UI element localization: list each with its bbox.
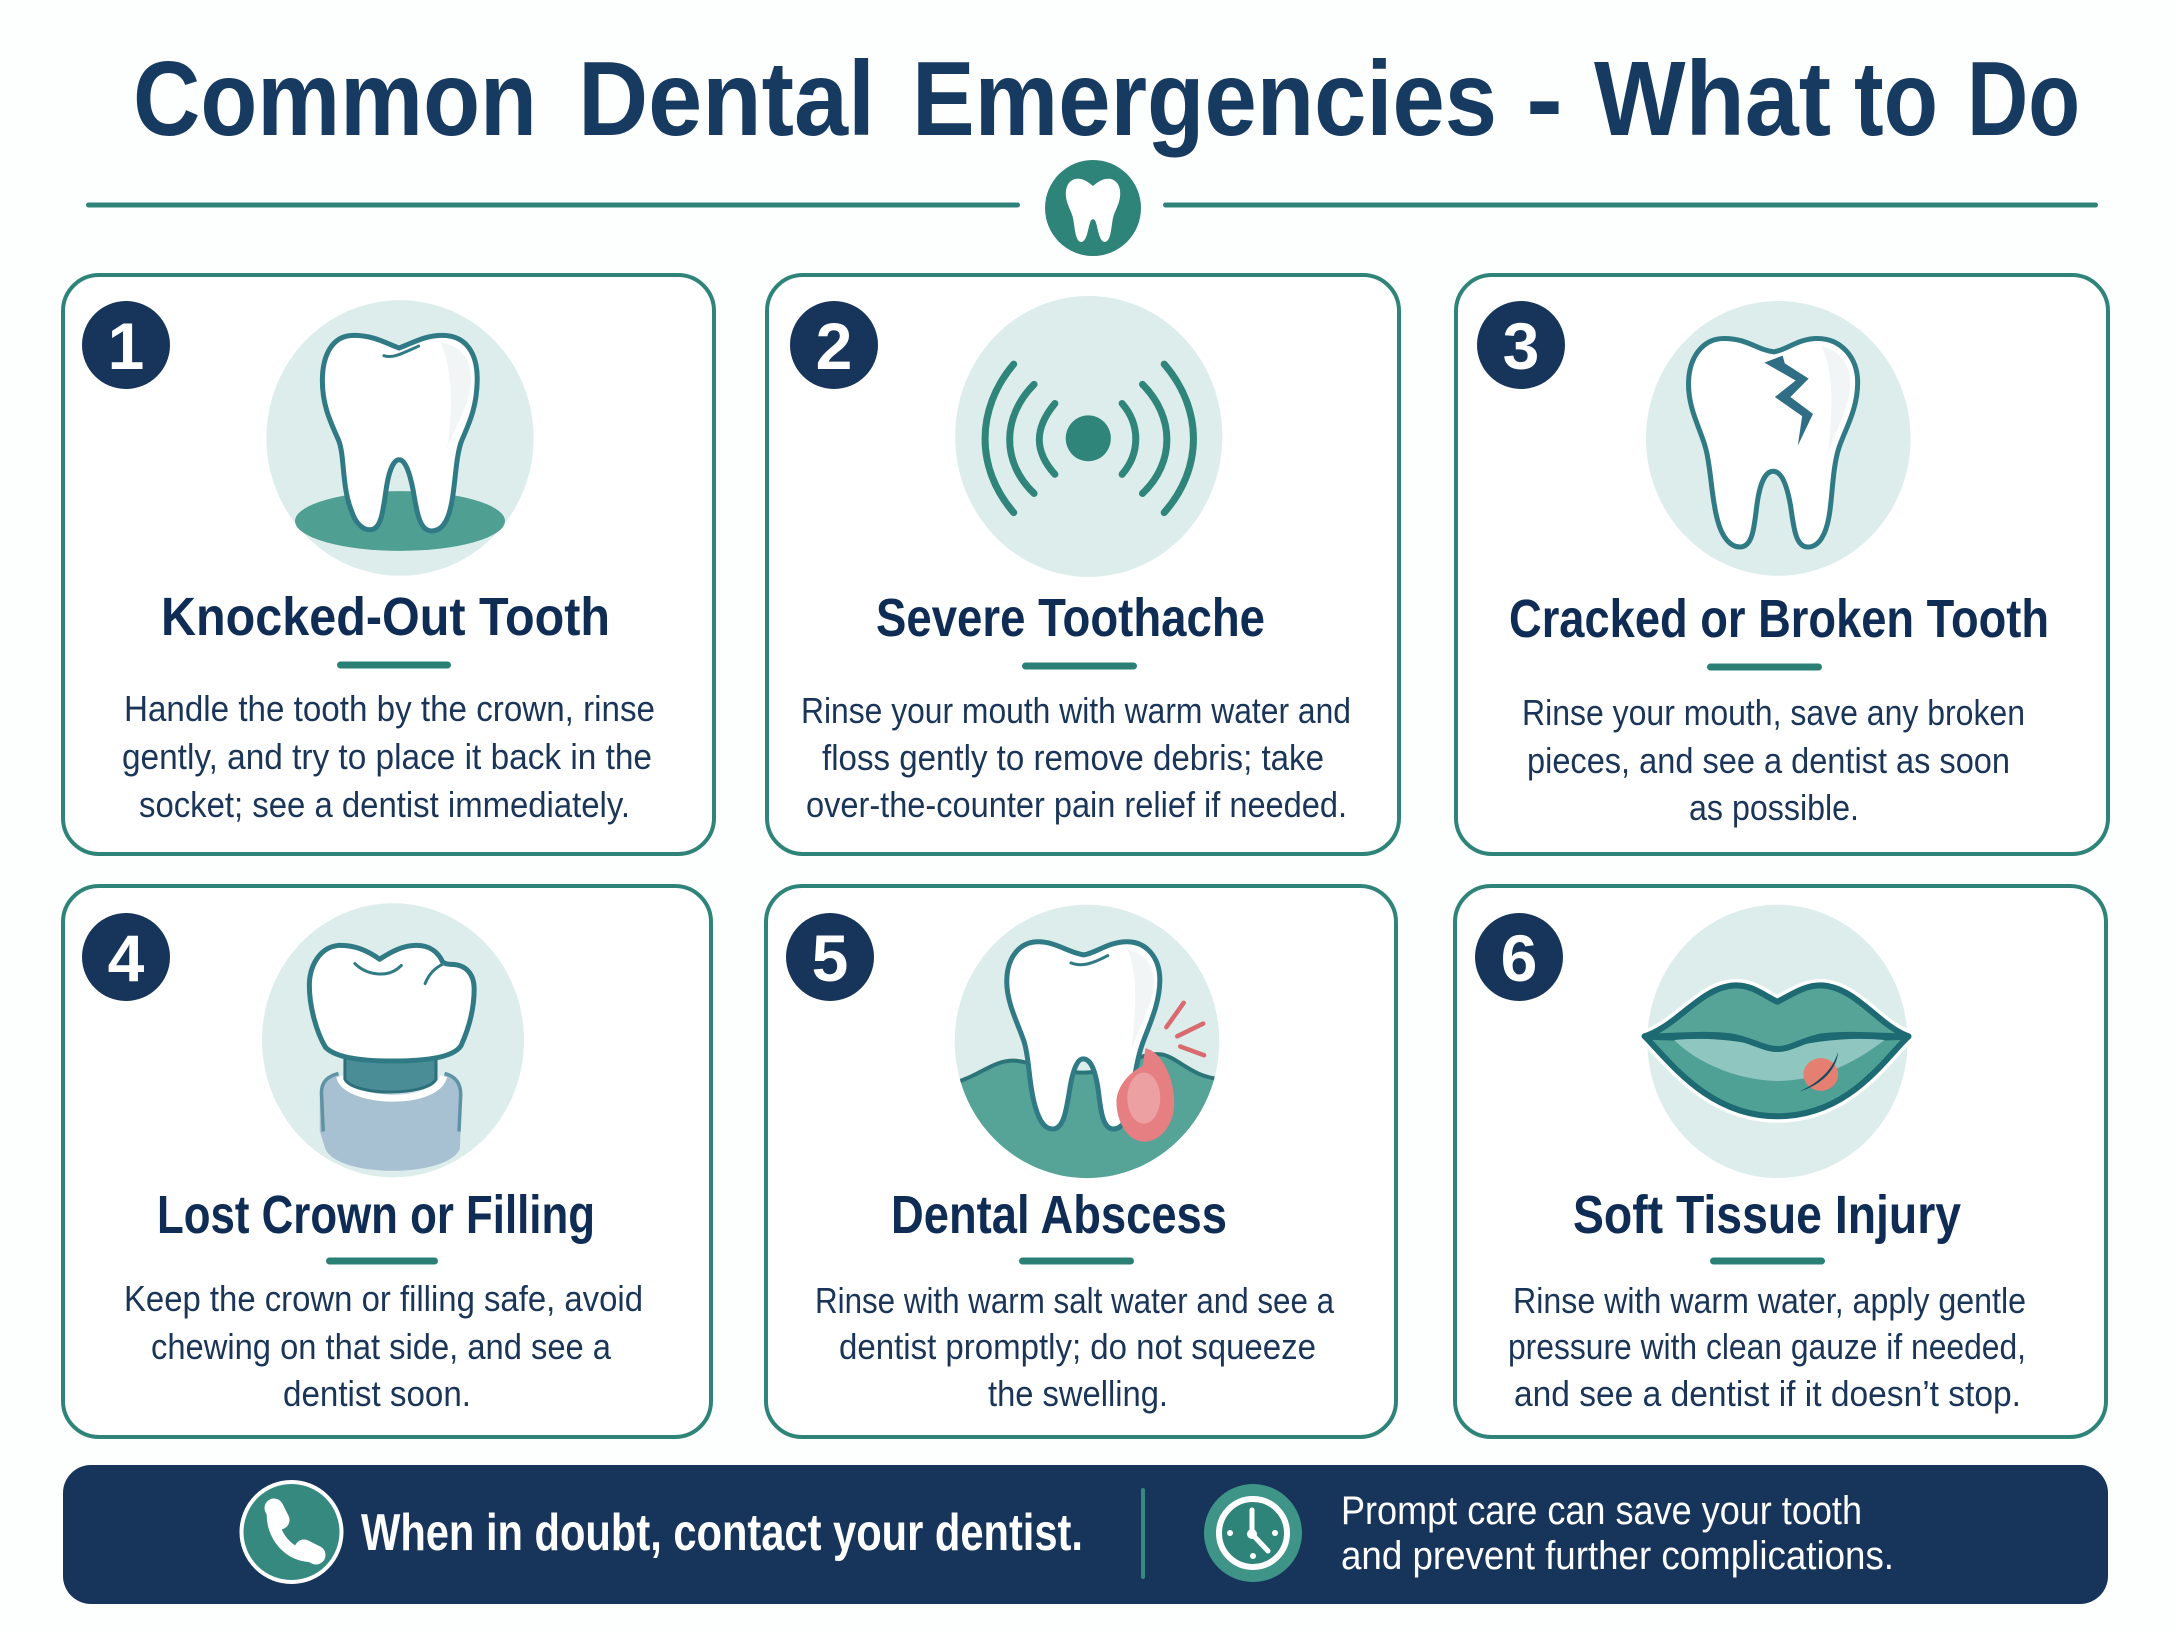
callout: prompt care: Prompt care can save your tooth (1341, 1489, 1862, 1533)
icon: crown and prepared tooth (262, 903, 524, 1177)
body text (122, 688, 655, 825)
number badge 2: 2 (816, 309, 852, 383)
heading rule (1710, 1258, 1825, 1264)
body text (815, 1280, 1335, 1414)
callout: contact your dentist: When in doubt, contact your dentist. (361, 1504, 1083, 1562)
number badge 2 (790, 301, 878, 389)
panel: knocked-out tooth (63, 275, 714, 854)
heading: Severe Toothache (876, 588, 1265, 648)
body text: socket; see a dentist immediately. (139, 784, 630, 825)
body text (124, 1278, 643, 1414)
heading rule (1707, 664, 1822, 670)
body text: over-the-counter pain relief if needed. (806, 784, 1347, 825)
number badge 3 (1477, 301, 1565, 389)
number badge 5: 5 (812, 921, 848, 995)
icon: cracked tooth (1646, 301, 1911, 576)
body text: floss gently to remove debris; take (822, 737, 1324, 778)
title: - (1526, 40, 1563, 158)
body text: Handle the tooth by the crown, rinse (124, 688, 655, 729)
body text: and see a dentist if it doesn’t stop. (1514, 1373, 2021, 1414)
body text: pressure with clean gauze if needed, (1508, 1326, 2026, 1367)
body text: chewing on that side, and see a (151, 1326, 612, 1367)
title: Emergencies (912, 40, 1497, 158)
title: Common (133, 40, 537, 158)
icon: clock (1204, 1484, 1302, 1582)
header divider with tooth badge (86, 160, 2098, 256)
body text (1508, 1280, 2026, 1414)
icon: injured lips (1645, 905, 1908, 1178)
title: Do (1967, 40, 2080, 158)
body text (1522, 692, 2025, 828)
title: What (1594, 40, 1831, 158)
heading: Knocked-Out Tooth (161, 587, 610, 647)
number badge 1: 1 (108, 309, 144, 383)
heading rule (326, 1258, 438, 1264)
body text: dentist promptly; do not squeeze (839, 1326, 1316, 1367)
heading rule (1019, 1258, 1134, 1264)
footer banner (63, 1465, 2108, 1604)
icon: knocked-out tooth over socket (266, 300, 534, 576)
callout: prompt care: and prevent further complications. (1341, 1534, 1894, 1578)
number badge 4: 4 (108, 921, 145, 995)
heading: Lost Crown or Filling (157, 1185, 595, 1245)
heading: Dental Abscess (891, 1185, 1227, 1245)
title: to (1854, 40, 1938, 158)
panel: lost crown or filling (63, 886, 711, 1437)
icon: tooth with abscess (952, 905, 1223, 1185)
body text: as possible. (1689, 787, 1859, 828)
panel: dental abscess (766, 886, 1396, 1437)
body text: Rinse your mouth, save any broken (1522, 692, 2025, 733)
body text (801, 690, 1351, 825)
body text: the swelling. (988, 1373, 1168, 1414)
number badge 5 (786, 913, 874, 1001)
heading: Cracked or Broken Tooth (1509, 589, 2049, 649)
title: Dental (578, 40, 875, 158)
panel: severe toothache (767, 275, 1399, 854)
body text: pieces, and see a dentist as soon (1527, 740, 2010, 781)
number badge 6 (1475, 913, 1563, 1001)
body text: Rinse with warm water, apply gentle (1513, 1280, 2026, 1321)
body text: Rinse your mouth with warm water and (801, 690, 1351, 731)
number badge 4 (82, 913, 170, 1001)
number badge 1 (82, 301, 170, 389)
body text: Rinse with warm salt water and see a (815, 1280, 1335, 1321)
icon: pain waves (955, 296, 1222, 577)
number badge 6: 6 (1501, 921, 1537, 995)
body text: Keep the crown or filling safe, avoid (124, 1278, 643, 1319)
heading rule (1022, 662, 1137, 670)
icon: phone (242, 1482, 342, 1582)
panel: cracked or broken tooth (1456, 275, 2108, 854)
callout: prompt care (1341, 1489, 1894, 1578)
body text: dentist soon. (283, 1373, 471, 1414)
panel: soft tissue injury (1455, 886, 2106, 1437)
number badge 3: 3 (1503, 309, 1539, 383)
body text: gently, and try to place it back in the (122, 736, 652, 777)
title (133, 40, 2080, 158)
heading rule (337, 662, 451, 668)
heading: Soft Tissue Injury (1573, 1185, 1961, 1245)
